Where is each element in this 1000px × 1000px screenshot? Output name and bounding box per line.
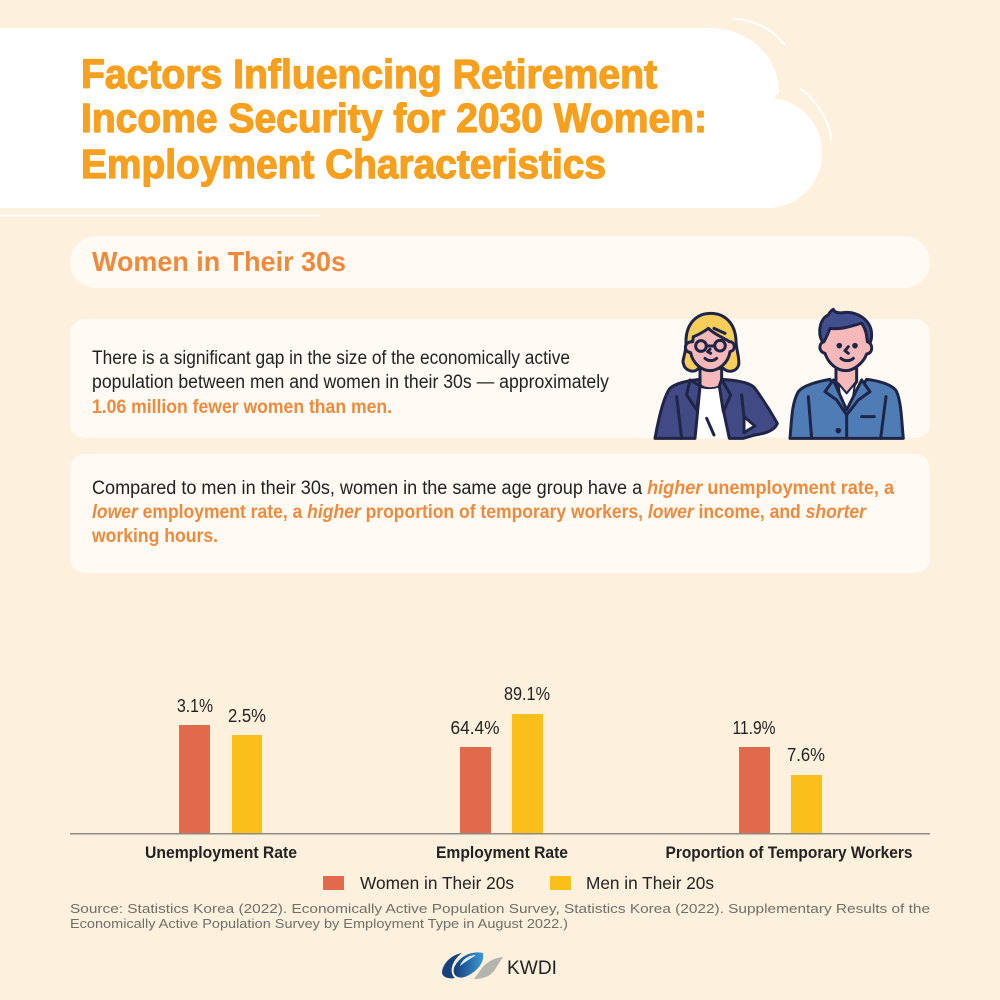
legend: Men in Their 20s: [586, 873, 714, 893]
bar chart: [70, 684, 930, 862]
source note: Source: Statistics Korea (2022). Economically Active Population Survey, Statistics Korea (2022). Supplementary Results of the: [70, 901, 930, 916]
icon: man: [790, 309, 903, 438]
bar group: unemployment rate: 2.5%: [228, 706, 266, 726]
logo: KWDI: KWDI: [507, 958, 557, 979]
source note: [70, 901, 930, 931]
bar group: unemployment rate: [145, 696, 297, 862]
bar group: employment rate: Employment Rate: [436, 843, 568, 862]
logo: KWDI: [442, 952, 557, 979]
bar group: employment rate: 89.1%: [504, 684, 550, 704]
bar group: proportion of temporary workers: Proportion of Temporary Workers: [666, 843, 912, 862]
bar group: proportion of temporary workers: [666, 718, 912, 862]
panel: economically active population: [70, 319, 930, 438]
title: Employment Characteristics: [81, 141, 606, 187]
legend: Women in Their 20s: [360, 873, 514, 893]
legend: [323, 873, 714, 893]
cloud title panel: [0, 19, 831, 216]
title: [81, 51, 707, 187]
panel: comparison text: [70, 454, 930, 573]
panel: comparison text: Compared to men in their 30s, women in the same age group have a higher unemployment rate, a: [92, 478, 894, 499]
bar group: employment rate: [436, 684, 568, 862]
subtitle pill: Women in Their 30s: [92, 246, 346, 277]
panel: comparison text: working hours.: [91, 526, 218, 547]
title: Factors Influencing Retirement: [81, 51, 657, 97]
bar group: employment rate: 64.4%: [450, 718, 500, 738]
panel: economically active population: 1.06 million fewer women than men.: [92, 397, 392, 418]
panel: economically active population: population between men and women in their 30s — approximately: [92, 372, 609, 393]
icon: woman: [655, 313, 777, 438]
bar group: proportion of temporary workers: 7.6%: [787, 745, 825, 765]
source note: Economically Active Population Survey by Employment Type in August 2022.): [70, 916, 568, 931]
subtitle pill: [70, 236, 930, 288]
bar group: unemployment rate: Unemployment Rate: [145, 843, 297, 862]
title: Income Security for 2030 Women:: [81, 95, 707, 141]
bar group: unemployment rate: 3.1%: [177, 696, 213, 716]
panel: comparison text: lower employment rate, a higher proportion of temporary workers, lower income, and shorter: [92, 502, 867, 523]
bar group: proportion of temporary workers: 11.9%: [732, 718, 776, 738]
panel: economically active population: There is a significant gap in the size of the economically active: [92, 348, 570, 369]
